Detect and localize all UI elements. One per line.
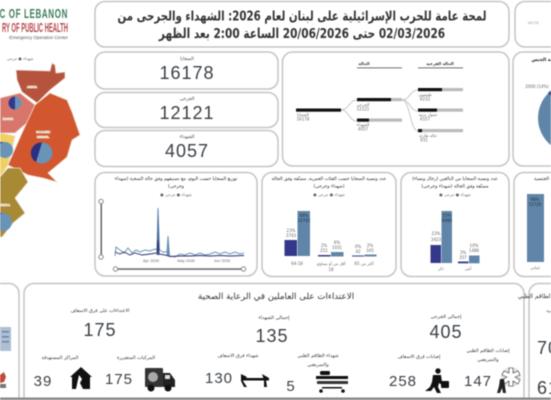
tree labels: 16178 [297, 116, 310, 122]
icon: ambulance [145, 368, 175, 392]
stat: total martyrs [255, 315, 290, 346]
stat: total martyrs: إجمالي الشهداء [259, 315, 290, 321]
age value labels: 345 [366, 248, 374, 253]
stat: targeted centers: 39 [34, 373, 52, 390]
panel: victims total: 16178 [159, 63, 215, 83]
map of Lebanon: NORTH [3, 117, 13, 121]
nationality bar: 98% [531, 197, 540, 202]
chart title [115, 176, 238, 197]
age value labels: 2% [321, 243, 327, 248]
age axis labels: 18 [328, 267, 334, 272]
timeline series [115, 208, 244, 257]
stat: medical staff martyrs: والتمريضي [307, 362, 329, 368]
stat: damaged vehicles [105, 355, 175, 392]
age value labels: 0% [355, 244, 361, 249]
stat: medical staff wounded: والتمريضي [477, 357, 499, 363]
map of Lebanon [0, 63, 80, 237]
stat: medical staff martyrs: شهداء الطاقم الطبي [297, 353, 339, 359]
age value labels: 251 [320, 248, 328, 253]
age value labels: 42 [355, 249, 361, 254]
stat: damaged vehicles: المركبات المتضررة [117, 355, 155, 361]
tree labels: 6233 [420, 96, 431, 102]
stat: total wounded: إجمالي الجرحى [430, 314, 462, 320]
panel: pie chart: 2000 (14%) [525, 84, 549, 89]
map legend: شهداء ● جرحى [7, 56, 34, 61]
panel: wounded total: 12121 [159, 103, 215, 123]
stat: medical staff wounded: إصابات الطاقم الطبي [466, 348, 510, 354]
map pie charts [0, 96, 52, 231]
panel: victims total: الضحايا [180, 57, 194, 62]
tree labels: حمول بدنية [419, 112, 438, 117]
panel: right bottom [518, 284, 551, 400]
stat: ambulance team wounded [389, 354, 449, 393]
gender value labels: 55% [443, 213, 452, 218]
stat: total martyrs: 135 [255, 326, 289, 346]
tree labels: حالة طارئة [419, 133, 437, 138]
panel: gender bar chart [401, 172, 509, 276]
tree headers: الحالة الفرعية [426, 61, 454, 66]
panel: daily timeline chart [95, 172, 257, 276]
title text: لمحة عامة للحرب الإسرائيلية على لبنان لعام 2026: الشهداء والجرحى من [117, 8, 487, 25]
heading: الاعتداءات على العاملين في الرعاية الصحية [198, 292, 354, 302]
header logo text [0, 8, 68, 40]
tree labels: 4057 [358, 126, 369, 132]
age value labels: 1031 [332, 245, 343, 250]
icon: medic with star of life [497, 367, 521, 393]
chart title: ● شهداء ● جرحى [313, 192, 345, 197]
pie [538, 83, 551, 153]
map of Lebanon: HERMEL [37, 135, 50, 139]
age value labels: 66% [300, 213, 309, 218]
gender value labels: 1486 [469, 248, 480, 253]
age value labels: 3743 [286, 233, 297, 238]
nationality bar [527, 194, 544, 270]
panel: left bottom [0, 284, 19, 400]
panel: nationality bar chart [514, 172, 551, 276]
panel: top right KPI: 16178 [527, 20, 539, 25]
chart title: ● شهداء ● جرحى [160, 192, 192, 197]
stat: total wounded: 405 [429, 322, 463, 342]
age value labels [286, 213, 374, 254]
age axis labels: أكثر من 65 [354, 261, 374, 266]
stat: attacks on ambulance teams [71, 308, 129, 340]
chart title: عدد ونسبة الضحايا من البالغين (رجال ونساء) [412, 176, 498, 182]
stat: damaged vehicles: 175 [105, 371, 133, 388]
gender bars [430, 211, 480, 263]
chart title: مصنّفة وفق الحالة (شهداء وجرحى) [421, 183, 489, 190]
age value labels: 23% [287, 228, 296, 233]
title text: 02/03/2026 حتى 20/06/2026 الساعة 2:00 بعد الظهر [158, 26, 445, 41]
chart title: وجرحى) [168, 184, 184, 190]
stat: targeted centers: المراكز المستهدفة [42, 355, 78, 361]
gender value labels: 3% [460, 250, 466, 255]
age axis labels: أقل من أو يساوي [316, 261, 346, 266]
timeline axis labels: Apr 2026 [143, 258, 160, 263]
chart title: (شهداء وجرحى) [313, 184, 345, 190]
panel: decomposition tree [282, 52, 509, 166]
age value labels: 6% [334, 240, 340, 245]
horizontal slider [113, 267, 246, 271]
chart title: توزيع الضحايا حسب اليوم، مع تصنيفهم وفق حالة الضحية (شهداء [115, 176, 238, 182]
panel: wounded total [95, 92, 278, 128]
stat: medical staff martyrs: 5 [286, 378, 296, 395]
tree headers: الحالة [358, 61, 370, 66]
panel: pie chart [513, 52, 551, 166]
age axis labels: 64-18 [291, 261, 303, 266]
icon: red cross marker [0, 372, 6, 388]
tree headers [357, 61, 463, 68]
icon: running medic [425, 368, 449, 393]
stat: ambulance team wounded: إصابات فرق الاسعاف [398, 354, 441, 360]
panel: right bottom: الطاقم الطبي [518, 293, 551, 300]
vertical slider [99, 199, 103, 259]
tree labels: الشهداء [357, 122, 369, 127]
icon: hospital bed [316, 371, 348, 393]
age bars [284, 211, 376, 256]
icon: stretcher [241, 374, 269, 387]
stat: medical staff wounded [464, 348, 521, 393]
gender value labels [431, 213, 480, 260]
gender value labels: 3423 [431, 237, 442, 242]
header logo text: RY OF PUBLIC HEALTH [2, 22, 68, 36]
gender value labels: 23% [432, 231, 441, 236]
nationality bar: 15726 [529, 202, 542, 207]
age value labels: 10745 [298, 218, 311, 223]
tree labels: 12121 [357, 106, 370, 112]
tree labels: 4557 [420, 116, 431, 122]
stat: medical staff wounded: 147 [464, 373, 492, 390]
icon: hospital building [0, 327, 11, 351]
tree labels [297, 92, 438, 142]
gender value labels: 357 [459, 255, 467, 260]
nationality bar: لبناني [530, 265, 540, 270]
gender value labels: 8989 [442, 218, 453, 223]
map of Lebanon: BAALBEK [36, 130, 51, 134]
stat: ambulance team wounded: 258 [389, 373, 417, 390]
timeline axis labels: Jun 2026 [214, 258, 231, 263]
tree labels: الضحايا [297, 112, 309, 117]
age axis labels [291, 261, 374, 272]
tree labels: الجرحى [357, 102, 369, 107]
stat: ambulance team martyrs [205, 353, 269, 387]
tree bars [296, 88, 463, 132]
panel: martyrs total [95, 130, 278, 166]
page bottom edge [0, 398, 551, 400]
chart title: عدد ونسبة الضحايا حسب الفئات العمرية، مصنّفة وفق الحالة [272, 175, 387, 182]
panel: age bar chart [262, 172, 396, 276]
timeline axis labels: May 2026 [177, 258, 196, 263]
panel: victims total [95, 52, 278, 89]
stat: attacks on ambulance teams: الاعتداءات على فرق الاسعاف [71, 308, 129, 314]
stat: attacks on ambulance teams: 175 [83, 320, 117, 340]
tree connectors [341, 90, 418, 131]
panel: martyrs total: 4057 [165, 141, 209, 161]
stat: medical staff martyrs [286, 353, 348, 395]
gender axis labels: ذكر [437, 266, 444, 271]
map of Lebanon: AKKAR [27, 85, 37, 89]
panel: wounded total: الجرحى [180, 97, 194, 102]
map of Lebanon: BEKAA [0, 203, 11, 207]
gender axis labels: أنثى [465, 266, 471, 271]
header logo text: -Emergency Operation Center [8, 35, 68, 40]
timeline axis labels [143, 258, 231, 263]
panel: attacks on healthcare workers [24, 284, 524, 400]
panel: martyrs total: الشهداء [180, 135, 194, 140]
stat: ambulance team martyrs: 130 [205, 370, 233, 387]
panel: top right KPI [515, 2, 551, 47]
stat: ambulance team martyrs: شهداء فرق الاسعاف [218, 353, 258, 359]
chart title [272, 175, 387, 197]
chart title [412, 176, 498, 197]
age value labels: 2% [367, 243, 373, 248]
panel: title [95, 2, 509, 47]
stat: targeted centers [34, 355, 92, 390]
gender axis labels [437, 266, 471, 271]
chart title: ● شهداء ● جرحى [439, 192, 471, 197]
icon: broken house [70, 367, 92, 389]
tree labels: 931 [420, 138, 428, 142]
title text [117, 8, 487, 41]
tree labels: طبيعيون [418, 92, 432, 97]
gender value labels: 10% [470, 243, 479, 248]
